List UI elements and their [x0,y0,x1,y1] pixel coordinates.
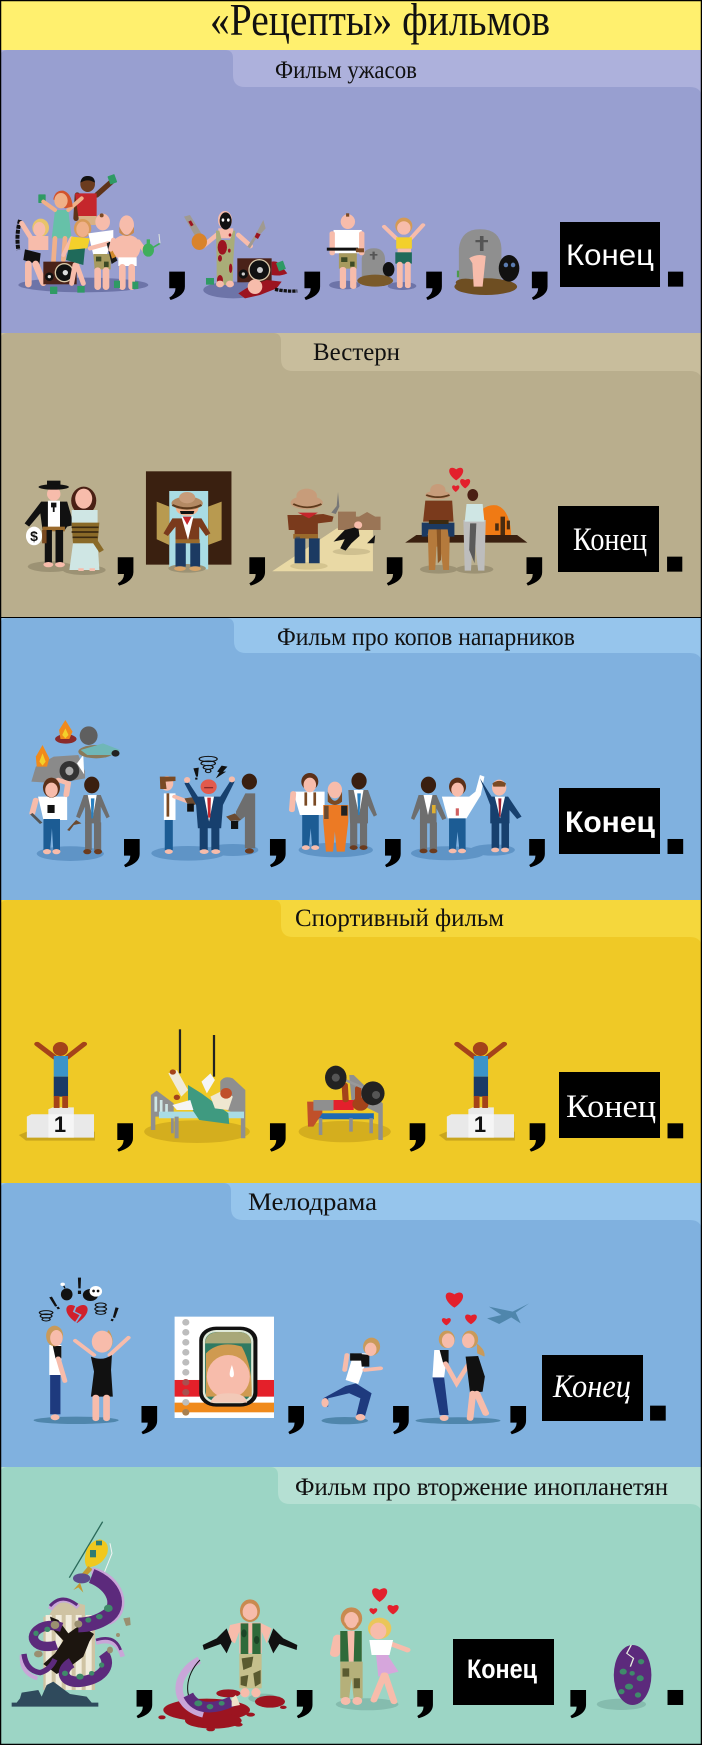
punctuation [124,839,683,867]
scene: chief yelling at cops [151,756,258,861]
end card: Конец [573,522,647,558]
scene: couple breaking up [34,1278,128,1424]
heading: sports film: Спортивный фильм [295,905,504,932]
text: podium number: 1 [474,1112,486,1137]
end card: Конец [566,239,654,272]
end card [559,1072,660,1138]
scene: bandit at saloon doors [146,471,231,573]
panel: alien invasion film [0,1467,702,1745]
end card [542,1355,643,1421]
end card: Конец [566,1089,656,1125]
end card: Конец [565,806,656,839]
scene: injured athlete in hospital bed [144,1029,250,1143]
panel: buddy cop film [0,618,702,900]
end card: Конец [467,1654,537,1684]
punctuation [118,557,682,586]
scene: teens partying [17,174,160,294]
scene: cops with arrested prisoner [292,773,377,857]
scene: hero with rescued woman and hearts [335,1588,407,1710]
scene: athlete on podium [19,1042,95,1141]
scene: cops and wrecked cars [31,720,120,861]
end card [559,788,660,854]
text: dollar sign on money bag: $ [30,528,38,544]
scene: survivors at grave [327,213,423,290]
panel: horror film [0,50,702,333]
scene: tentacles destroying skyscraper [12,1522,131,1707]
panel: western [0,333,702,617]
end card: Конец [552,1369,631,1405]
scene: villain and tied woman [25,481,106,575]
punctuation [141,1406,666,1434]
scene: killer with chainsaw [184,211,297,298]
punctuation [117,1123,683,1152]
scene: duel on main street [272,489,381,571]
scene: hand rising from grave [454,229,519,295]
scene: athlete bench pressing [299,1066,391,1142]
panel: melodrama [0,1183,702,1467]
scene: alien egg [597,1645,651,1710]
scene: riding into the sunset with hearts [405,468,527,574]
heading: alien invasion film: Фильм про вторжение инопланетян [295,1474,668,1501]
title banner [0,0,702,50]
end card [560,222,660,287]
scene: crying woman in airplane window [175,1317,274,1418]
heading: buddy cop film: Фильм про копов напарников [277,624,575,651]
punctuation [169,272,683,300]
scene: hero with guns and dead tentacle [158,1599,297,1731]
end card [558,506,659,572]
text: podium number: 1 [54,1112,66,1137]
scene: couple reunited with hearts [415,1292,529,1424]
heading: melodrama: Мелодрама [248,1189,377,1216]
punctuation [137,1690,683,1718]
scene: cops awarded by chief [411,775,522,860]
panel: sports film [0,900,702,1183]
scene: man running to airport [321,1338,381,1424]
scene: winner on podium [439,1042,515,1141]
heading: western: Вестерн [313,339,400,366]
end card [453,1639,554,1705]
heading: horror film: Фильм ужасов [275,57,417,84]
